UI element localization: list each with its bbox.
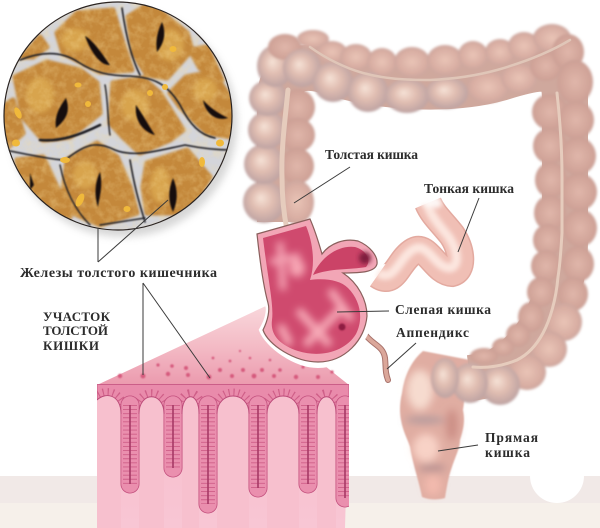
label: colon section [43, 309, 111, 353]
gland tissue block [97, 385, 349, 528]
descending colon pouches [431, 60, 597, 405]
gland openings [30, 22, 228, 212]
small intestine [378, 186, 460, 278]
label: glands: Железы толстого кишечника [20, 266, 217, 281]
longitudinal bands [282, 40, 570, 367]
colon body [280, 68, 565, 378]
transverse colon pouches [283, 24, 584, 113]
label: rectum: Прямая [485, 430, 538, 445]
background band [0, 449, 600, 528]
cecum section [257, 219, 377, 365]
label: cecum: Слепая кишка [395, 302, 491, 317]
yellow droplets [12, 46, 224, 212]
appendix [364, 333, 388, 380]
ascending colon pouches [243, 34, 315, 224]
panel: colon section with glands [97, 305, 349, 528]
magnified mucosa surface [97, 305, 349, 385]
label: small intestine: Тонкая кишка [424, 181, 514, 196]
dark cracks [5, 5, 232, 225]
leader lines [98, 167, 479, 451]
label: rectum: кишка [485, 445, 530, 460]
label: colon section: ТОЛСТОЙ [43, 323, 108, 338]
label: colon section: КИШКИ [43, 338, 99, 353]
label: colon section: УЧАСТОК [43, 309, 111, 324]
gland cells [2, 3, 232, 225]
magnified view: colon glands circle [0, 0, 237, 237]
rectum [400, 351, 470, 499]
label: rectum [485, 430, 538, 460]
label: large intestine: Толстая кишка [325, 147, 418, 162]
mottled texture [0, 0, 236, 236]
label: appendix: Аппендикс [396, 325, 469, 340]
glands [97, 384, 349, 528]
large intestine [243, 24, 597, 405]
